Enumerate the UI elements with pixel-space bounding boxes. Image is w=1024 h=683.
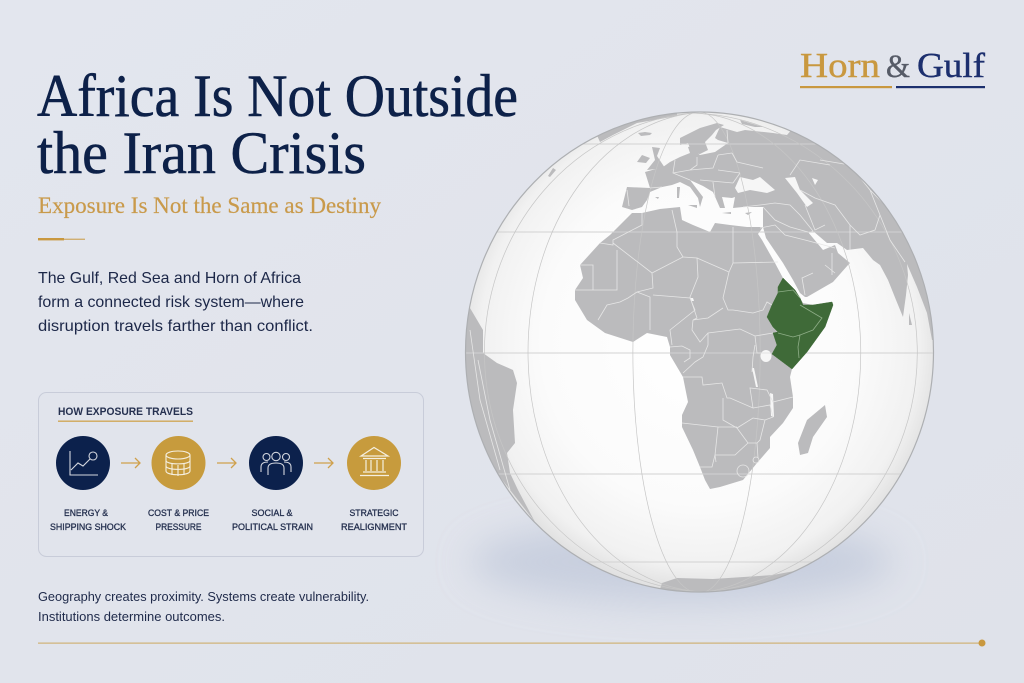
intro text: form a connected risk system—where [38, 294, 304, 311]
Greenland [598, 114, 677, 142]
Great Britain [647, 147, 665, 170]
arrow [217, 458, 236, 468]
title [37, 63, 518, 186]
step labels: COST & PRICE [148, 508, 209, 519]
step labels: SHIPPING SHOCK [50, 522, 127, 533]
highlighted Horn of Africa [767, 278, 833, 369]
globe [464, 111, 934, 593]
Mediterranean islands [655, 187, 752, 215]
arrow [121, 458, 140, 468]
inland water [690, 177, 818, 417]
land masses [466, 114, 932, 592]
panel: how exposure travels [38, 392, 424, 556]
icon: energy chart [56, 436, 110, 490]
intro text [38, 270, 313, 335]
Eurasia [622, 127, 932, 340]
step labels: POLITICAL STRAIN [232, 522, 313, 533]
icon: people [249, 436, 303, 490]
Antarctica [650, 560, 830, 620]
title: Africa Is Not Outside [37, 63, 518, 129]
Middle East and Central Asia borders [743, 160, 905, 295]
step labels: STRATEGIC [350, 508, 399, 519]
step labels: PRESSURE [156, 522, 202, 533]
panel heading: HOW EXPOSURE TRAVELS [58, 406, 193, 418]
Novaya Zemlya [740, 120, 763, 127]
logo: Gulf [917, 46, 985, 85]
country borders [470, 130, 905, 490]
closing text: Institutions determine outcomes. [38, 609, 225, 624]
accent divider [38, 238, 85, 240]
step labels: SOCIAL & [252, 508, 293, 519]
step labels: ENERGY & [64, 508, 109, 519]
Madagascar [798, 405, 827, 455]
South America [440, 300, 535, 522]
bottom rule [38, 640, 986, 646]
icon: institution [347, 436, 401, 490]
step labels: REALIGNMENT [341, 522, 407, 533]
Africa [575, 207, 833, 489]
logo [800, 46, 985, 88]
Scandinavia [680, 123, 724, 154]
Sri Lanka [909, 313, 912, 325]
globe shadow [470, 520, 894, 604]
closing text [38, 589, 369, 624]
Canada [548, 168, 556, 177]
intro text: The Gulf, Red Sea and Horn of Africa [38, 270, 301, 287]
graticule [460, 112, 940, 593]
logo: Horn [800, 46, 880, 85]
closing text: Geography creates proximity. Systems create vulnerability. [38, 589, 369, 604]
intro text: disruption travels farther than conflict. [38, 318, 313, 335]
Ireland [637, 155, 650, 163]
title: the Iran Crisis [37, 120, 366, 186]
Iceland [638, 132, 652, 136]
Europe borders [627, 130, 763, 206]
arrow [314, 458, 333, 468]
subtitle: Exposure Is Not the Same as Destiny [38, 193, 381, 218]
step labels [50, 508, 407, 533]
logo: & [886, 49, 910, 85]
icon: coin stack [152, 436, 206, 490]
